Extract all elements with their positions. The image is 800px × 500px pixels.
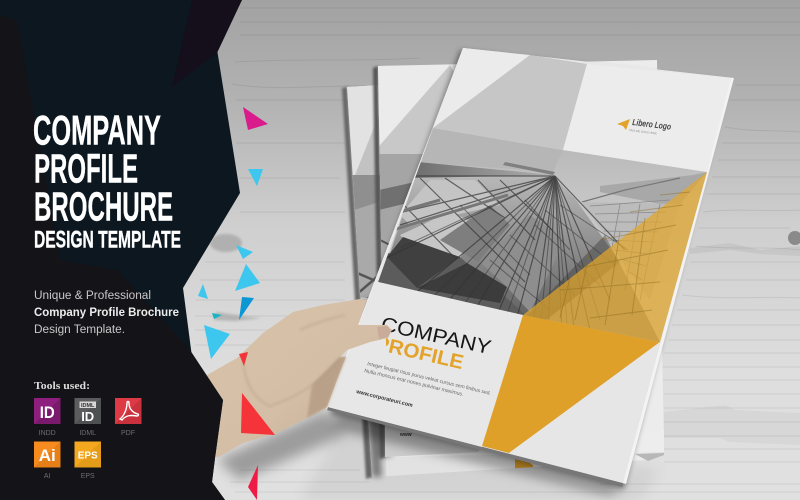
icon: EPS	[74, 442, 101, 480]
back brochure, middle: www	[399, 432, 412, 438]
cover description: Nulla rhoncus erat nones pulvinar maximus.	[364, 368, 464, 398]
description text: Company Profile Brochure	[34, 307, 179, 319]
icon: EPS: EPS	[81, 473, 95, 480]
cover text	[355, 313, 493, 409]
white lower right panel	[509, 342, 660, 483]
decorative coloured triangles	[198, 107, 275, 500]
icon: INDD	[34, 398, 60, 437]
hand shape	[200, 299, 392, 458]
cover description: Integer feugiat risus purus veleat cursus sem finibus sed.	[367, 361, 491, 397]
panel facet: left near-black	[0, 15, 225, 500]
hand holding brochure	[200, 299, 392, 458]
building photo	[378, 128, 707, 342]
icon: PDF: PDF	[121, 430, 135, 437]
icon: IDML	[74, 398, 101, 437]
title: PROFILE	[34, 146, 138, 192]
back brochure, middle	[373, 60, 664, 459]
dark side panel	[0, 0, 242, 500]
top right panel	[563, 64, 731, 172]
icon: IDML: IDML	[81, 403, 95, 409]
description text: Design Template.	[34, 324, 125, 336]
title: BROCHURE	[34, 184, 173, 230]
icon: paper plane	[617, 119, 630, 130]
title: COMPANY	[33, 106, 161, 154]
top left light facet	[433, 48, 530, 128]
brochure page edge	[326, 48, 734, 484]
icon: AI: Ai	[39, 446, 56, 465]
icon: INDD: ID	[40, 403, 55, 422]
icon: EPS: EPS	[78, 450, 98, 462]
description text: Unique & Professional	[34, 290, 151, 302]
hand shadow creases	[243, 315, 345, 407]
title: DESIGN TEMPLATE	[34, 226, 181, 254]
top grey facet	[433, 55, 587, 150]
back brochure, left	[340, 85, 534, 480]
logo: TAGLINE GOES HERE	[629, 128, 657, 135]
icon: INDD: INDD	[39, 430, 56, 437]
yellow translucent overlay	[523, 172, 707, 342]
fingers behind brochure	[307, 357, 346, 418]
icon: IDML: ID	[81, 409, 94, 424]
solid yellow panel	[482, 315, 660, 453]
panel facet: top purple	[172, 0, 242, 87]
title	[33, 106, 181, 254]
front brochure shadow	[330, 50, 728, 494]
description text	[34, 290, 179, 336]
tools used heading: Tools used:	[34, 380, 90, 392]
front brochure cover	[326, 48, 734, 487]
cover subheading: PROFILE	[373, 332, 466, 374]
white lower left panel	[328, 282, 523, 447]
overlay grid lines	[560, 192, 690, 325]
logo: Libero Logo	[632, 117, 672, 132]
back sheet bottom right edge	[520, 430, 664, 467]
logo	[617, 117, 672, 135]
icon: IDML: IDML	[79, 430, 96, 437]
icon: PDF	[115, 398, 142, 437]
brochure spine thickness	[327, 407, 623, 487]
cover url: www.corporateuri.com	[355, 389, 413, 409]
cover heading: COMPANY	[379, 313, 493, 359]
thumbnail	[377, 326, 391, 339]
cover sheet	[328, 48, 731, 483]
icon: AI	[34, 442, 60, 480]
icon: AI: AI	[44, 473, 51, 480]
